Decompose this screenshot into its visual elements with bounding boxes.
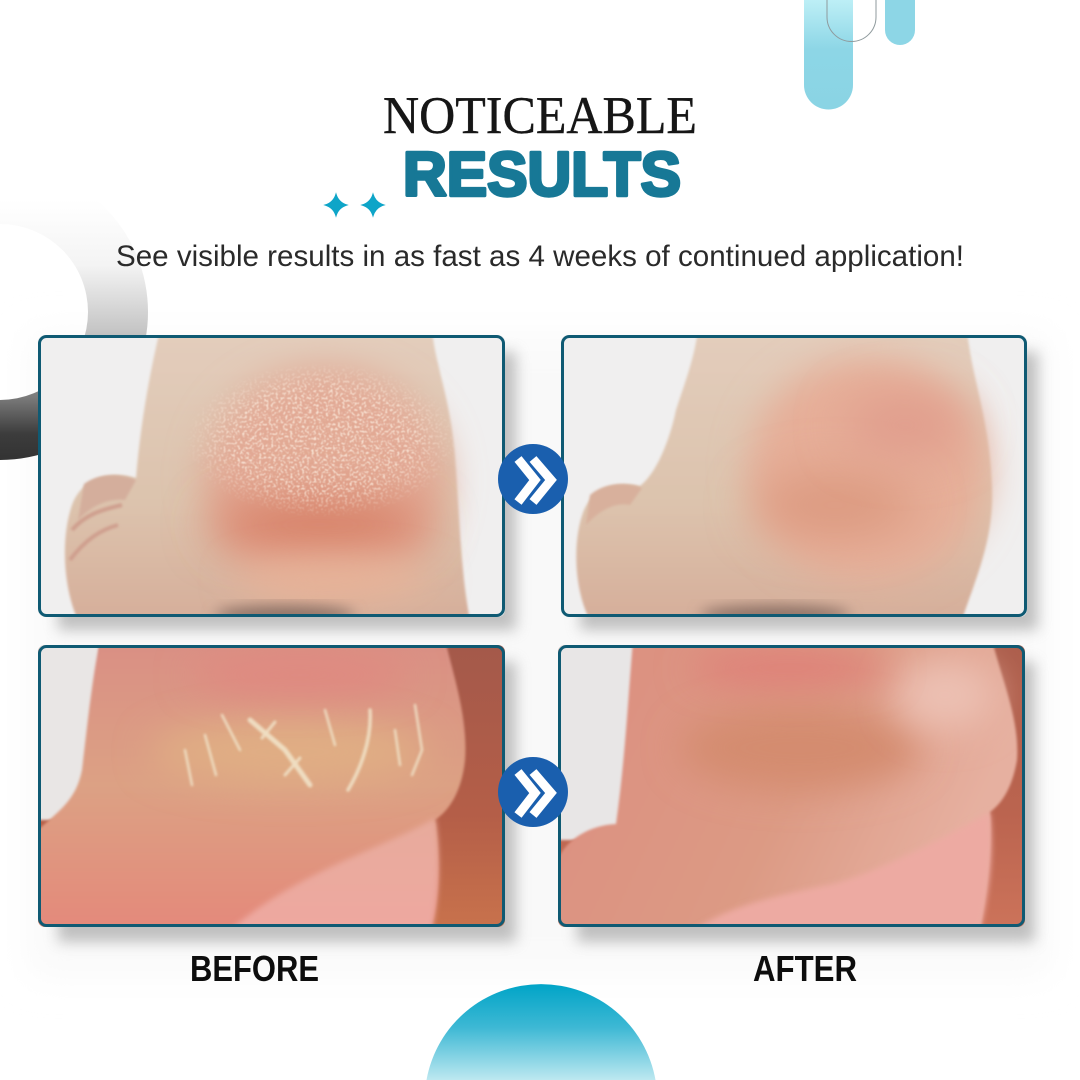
label: before: BEFORE (190, 948, 319, 989)
icon: sparkle stars (325, 194, 384, 216)
heel cracks (185, 705, 422, 790)
panel: before photo bottom (38, 640, 505, 930)
panel: before photo top (38, 330, 505, 625)
decorative pill outline (827, 0, 876, 41)
crackled skin texture (198, 369, 446, 514)
label: after: AFTER (753, 948, 857, 989)
arrow icon bottom (498, 757, 568, 827)
decorative pill large (804, 0, 853, 110)
soft grey backdrop behind photos (30, 335, 1050, 975)
title: results: RESULTS (403, 140, 681, 210)
subtitle: See visible results in as fast as 4 weeks of continued application! (116, 240, 964, 273)
title: noticeable: NOTICEABLE (383, 87, 697, 145)
decorative pill small (885, 0, 915, 45)
decorative ring left (0, 164, 148, 460)
arrow icon top (498, 444, 568, 514)
decorative dome bottom (426, 984, 656, 1080)
panel: after photo top (561, 330, 1027, 625)
panel shadows (58, 352, 1038, 942)
panel: after photo bottom (558, 640, 1025, 930)
